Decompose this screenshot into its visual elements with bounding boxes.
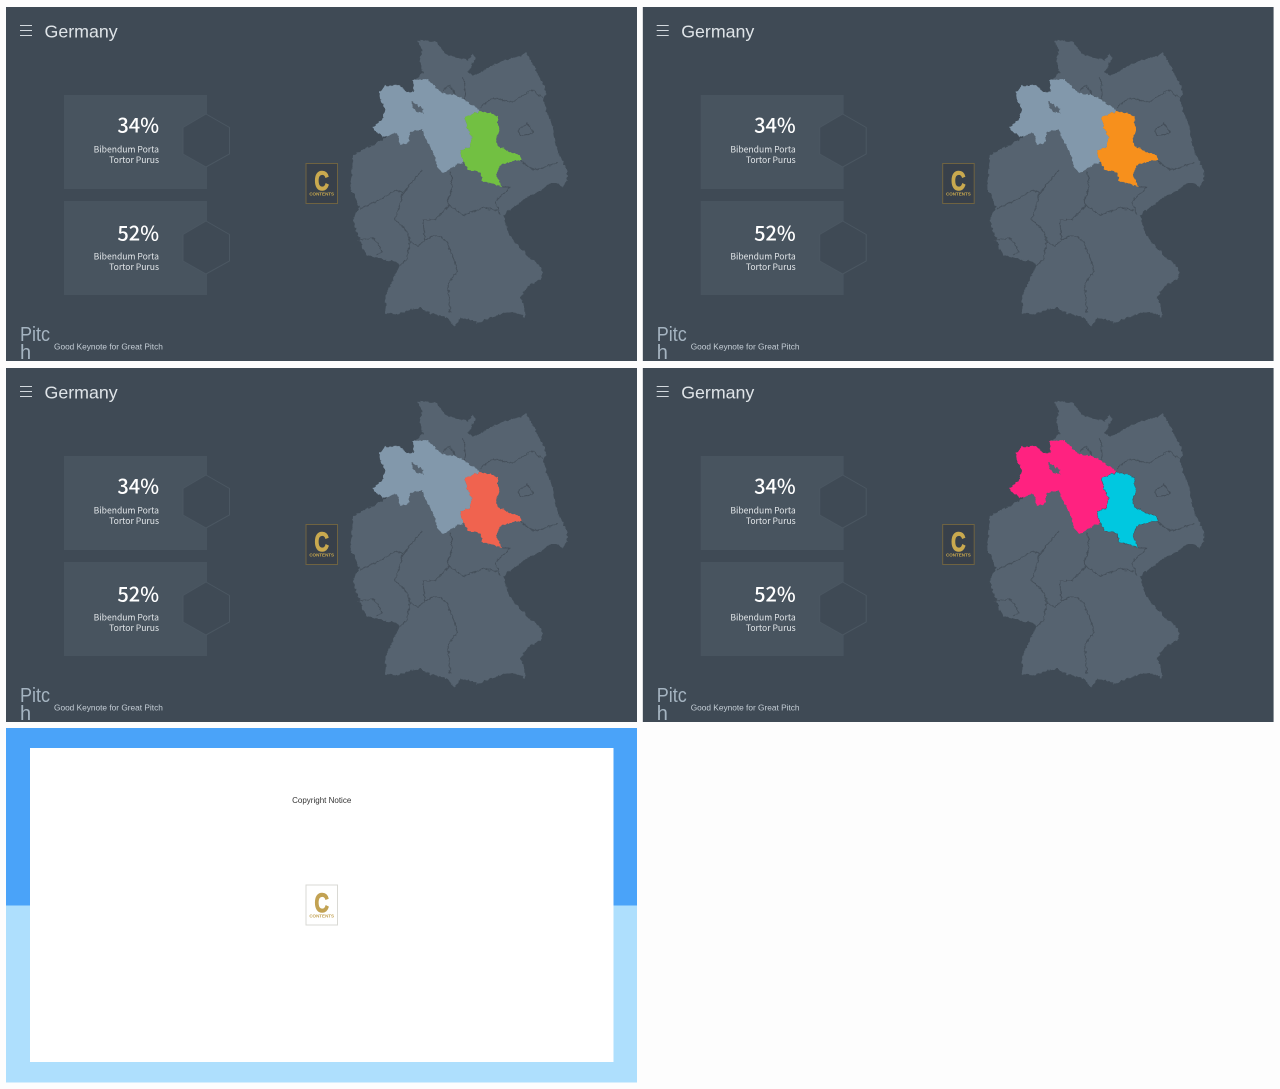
stat card: 52% [64,562,230,656]
heading: Germany [681,382,754,402]
map of Germany [350,401,567,688]
stat card: 52%: 52% [754,218,796,246]
panel: copyright slide [6,728,637,1082]
footer: h [20,342,31,364]
stat card: 52%: Bibendum Porta [730,612,796,624]
heading: Germany [44,22,118,42]
panel: Germany slide, orange [643,7,1274,364]
footer: Good Keynote for Great Pitch [691,342,800,352]
stat card: 34%: 34% [117,110,159,138]
footer: Good Keynote for Great Pitch [54,342,163,352]
footer: Pitc [20,324,50,346]
footer [658,687,799,720]
copyright text: Copyright Notice [292,796,352,805]
panel: Germany slide, green [6,7,637,364]
panel: Germany slide, red [6,368,637,725]
logo: C [314,888,329,919]
stat card: 52% [701,201,866,295]
footer: Pitc [20,685,50,707]
logo: CONTENTS [946,552,971,558]
icon: menu [20,25,32,36]
stat card: 34%: Bibendum Porta [730,144,796,156]
stat card: 52%: Tortor Purus [109,261,159,273]
logo: CONTENTS [309,552,334,558]
logo [943,524,974,564]
heading: Germany [681,22,754,42]
stat card: 34%: Tortor Purus [109,515,159,527]
stat card: 52%: Tortor Purus [109,622,159,634]
map of Germany [987,401,1204,688]
stat card: 52% [64,201,230,295]
stat card: 34%: 34% [754,470,796,500]
stat card: 34%: Tortor Purus [109,154,159,166]
footer: Good Keynote for Great Pitch [691,702,800,712]
logo: CONTENTS [309,192,334,196]
stat card: 52%: 52% [117,578,159,608]
logo: CONTENTS [946,192,971,196]
footer [658,326,799,359]
panel: Germany slide, pink and cyan [643,368,1274,725]
logo [306,164,338,204]
stat card: 52%: 52% [117,218,159,246]
stat card: 52%: Bibendum Porta [94,250,159,262]
heading: Germany [44,382,118,402]
stat card: 34% [701,456,866,550]
footer [21,326,162,359]
footer: Pitc [657,685,687,707]
icon: menu [657,25,669,36]
stat card: 34%: 34% [754,110,796,138]
logo: C [314,166,329,197]
stat card: 34%: Bibendum Porta [94,144,159,156]
footer: h [20,703,31,725]
stat card: 52% [701,562,866,656]
logo: C [314,527,329,558]
stat card: 34%: Tortor Purus [746,154,796,166]
logo: C [951,527,966,558]
stat card: 52%: Tortor Purus [746,261,796,273]
footer: h [657,703,668,725]
footer: Good Keynote for Great Pitch [54,702,163,712]
stat card: 52%: Bibendum Porta [730,250,796,262]
logo [306,524,338,564]
stat card: 34%: Bibendum Porta [94,504,159,516]
icon: menu [657,386,669,397]
logo [306,885,338,925]
map of Germany [987,40,1204,327]
footer: Pitc [657,324,687,346]
stat card: 34%: Bibendum Porta [730,504,796,516]
stat card: 34% [64,95,230,189]
stat card: 34% [64,456,230,550]
stat card: 52%: Bibendum Porta [94,612,159,624]
icon: menu [20,386,32,397]
logo [943,164,974,204]
stat card: 52%: Tortor Purus [746,622,796,634]
stat card: 34%: 34% [117,470,159,500]
stat card: 34% [701,95,866,189]
footer: h [657,342,668,364]
stat card: 52%: 52% [754,578,796,608]
logo: C [951,166,966,197]
map of Germany [350,40,567,327]
logo: CONTENTS [309,914,334,918]
stat card: 34%: Tortor Purus [746,515,796,527]
footer [21,687,162,720]
